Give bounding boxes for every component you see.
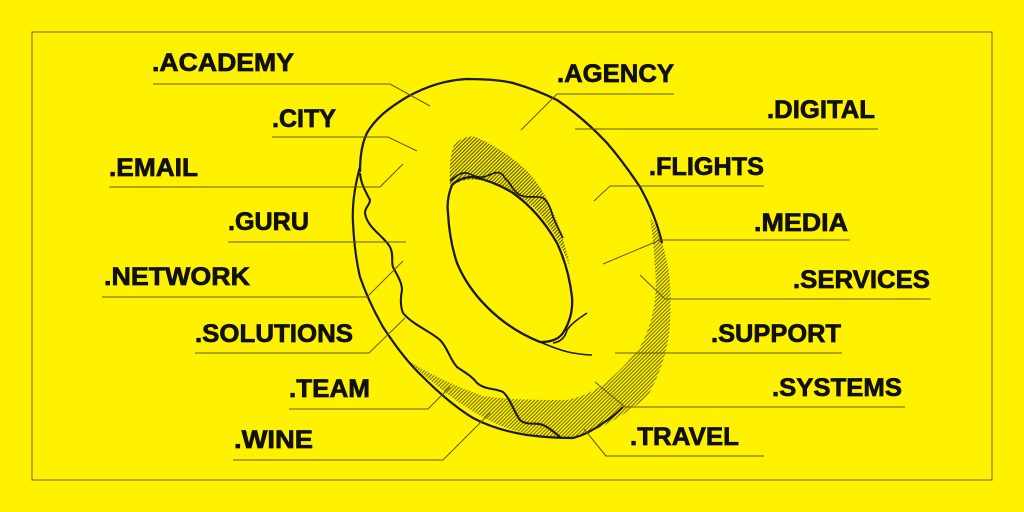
label: .DIGITAL: .DIGITAL: [767, 96, 875, 124]
label: .GURU: .GURU: [228, 208, 309, 236]
label: .SUPPORT: .SUPPORT: [711, 320, 841, 348]
label: .MEDIA: [603, 209, 850, 264]
label: .ACADEMY: .ACADEMY: [152, 49, 294, 77]
label: .EMAIL: .EMAIL: [109, 154, 198, 182]
label: .AGENCY: [521, 60, 674, 130]
label: .NETWORK: .NETWORK: [104, 263, 250, 291]
label: .TRAVEL: .TRAVEL: [630, 423, 739, 451]
ring: inner stub stroke: [553, 313, 587, 343]
label: .MEDIA: .MEDIA: [754, 209, 848, 237]
ring: upper outer contour: [360, 79, 662, 243]
label: .TRAVEL: [584, 423, 764, 456]
ring: inner lower tail: [540, 342, 592, 355]
label: .WINE: [233, 413, 490, 460]
ring: inner hole contour: [448, 177, 572, 342]
label: .SYSTEMS: [595, 374, 905, 407]
ring: wavy inner edge: [450, 173, 563, 238]
illustration: ring sketch: [353, 79, 671, 438]
label: .SOLUTIONS: [195, 318, 405, 353]
label: .SYSTEMS: .SYSTEMS: [772, 374, 902, 402]
label: .EMAIL: [109, 154, 403, 187]
label: .CITY: [272, 105, 417, 151]
label: .SERVICES: .SERVICES: [793, 266, 930, 294]
label: .FLIGHTS: .FLIGHTS: [649, 153, 764, 181]
hatching: inner hole shadow: [450, 136, 570, 267]
label: .NETWORK: [102, 261, 403, 297]
label: .SOLUTIONS: .SOLUTIONS: [195, 320, 353, 348]
label: .TEAM: [289, 375, 450, 409]
label: .AGENCY: .AGENCY: [557, 60, 674, 88]
ring: wavy icing edge: [360, 173, 560, 437]
label: .CITY: .CITY: [272, 105, 336, 133]
ring: lower outer contour: [353, 167, 623, 438]
label: .SERVICES: [640, 266, 931, 299]
label: .TEAM: .TEAM: [289, 375, 370, 403]
label: .FLIGHTS: [594, 153, 764, 201]
hatching: outer lower shadow: [403, 217, 671, 438]
label: .WINE: .WINE: [234, 426, 313, 454]
label: .ACADEMY: [152, 49, 430, 106]
